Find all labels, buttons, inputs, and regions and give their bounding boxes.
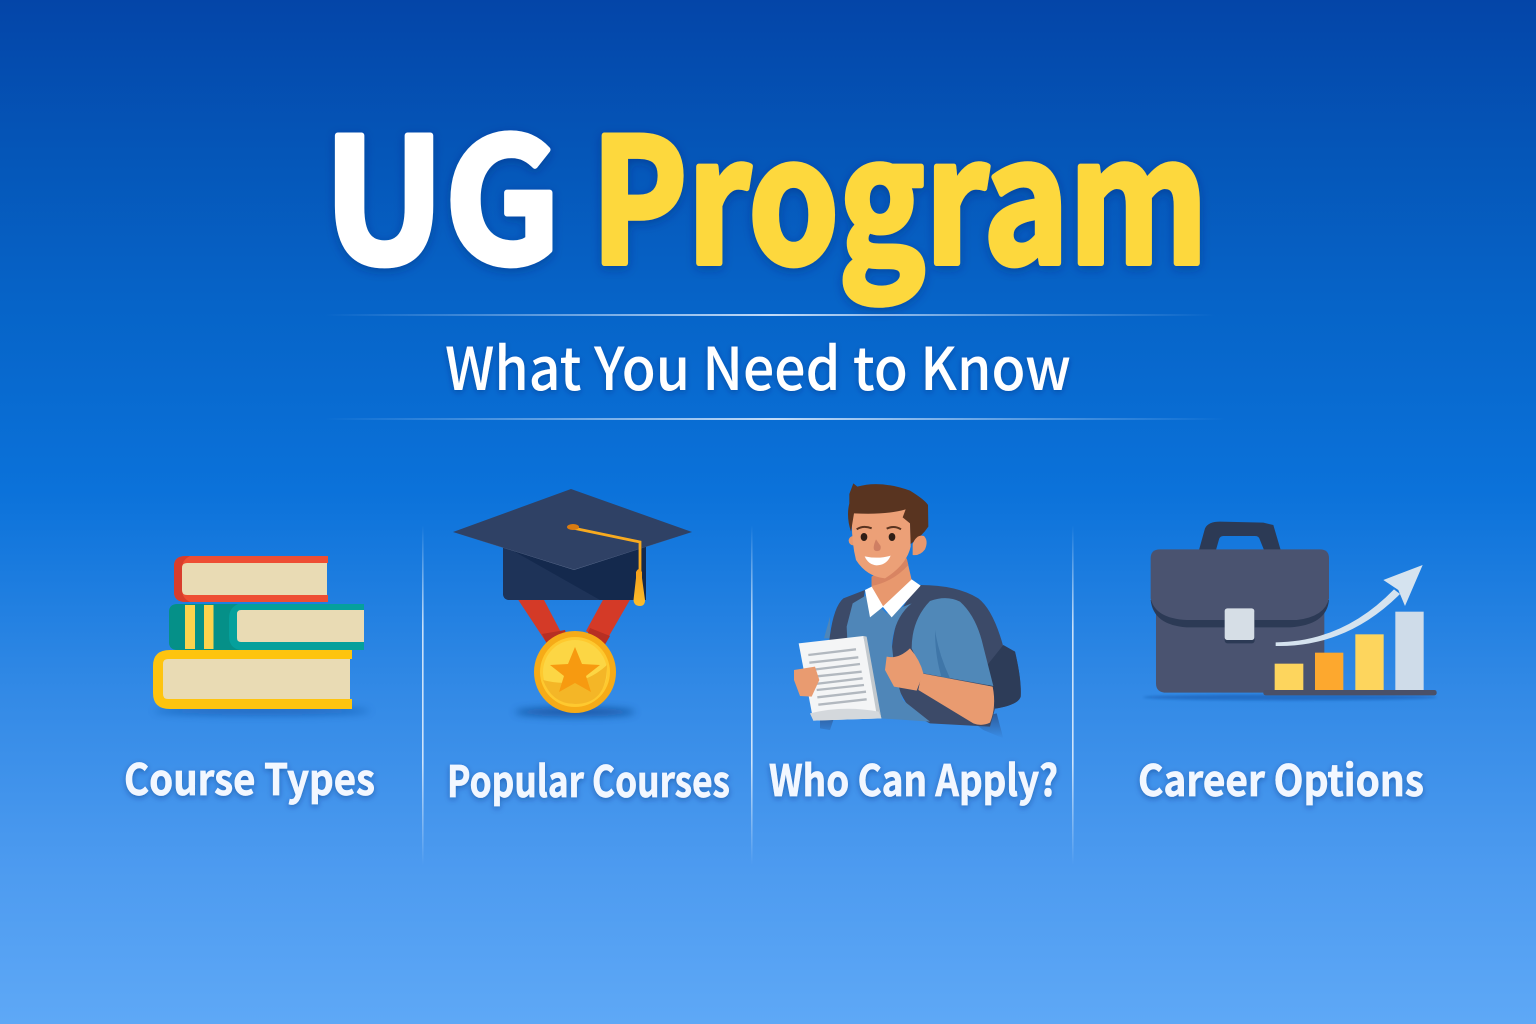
shirt [847, 595, 930, 722]
title [324, 63, 1208, 313]
paper [799, 636, 881, 721]
face [852, 503, 911, 578]
label: Who Can Apply?: Who Can Apply? [769, 747, 1058, 809]
left ear [849, 536, 858, 545]
right ear [913, 536, 927, 555]
right arm [918, 673, 994, 725]
bar chart [1263, 612, 1437, 695]
hair [848, 483, 928, 544]
briefcase [1151, 522, 1329, 693]
collar [865, 587, 883, 617]
title: UG [324, 63, 560, 313]
growth arrow [1276, 565, 1423, 646]
facial features [857, 527, 901, 565]
label: Popular Courses: Popular Courses [447, 748, 730, 810]
label: Career Options: Career Options [1138, 747, 1424, 809]
neck [872, 558, 912, 607]
icon: briefcase with growth chart [1143, 522, 1437, 700]
subtitle: What You Need to Know [445, 322, 1071, 407]
mortarboard cap [453, 489, 692, 606]
title: Program [591, 63, 1208, 313]
backpack [892, 585, 1021, 727]
left hand [794, 667, 819, 697]
medal ribbon [517, 598, 631, 648]
icon: stack of books [153, 556, 370, 715]
right hand [885, 648, 923, 691]
gold medal [534, 631, 616, 713]
label: Course Types: Course Types [124, 746, 375, 808]
icon: student with backpack [794, 483, 1021, 738]
icon: graduation cap with medal [453, 489, 692, 716]
